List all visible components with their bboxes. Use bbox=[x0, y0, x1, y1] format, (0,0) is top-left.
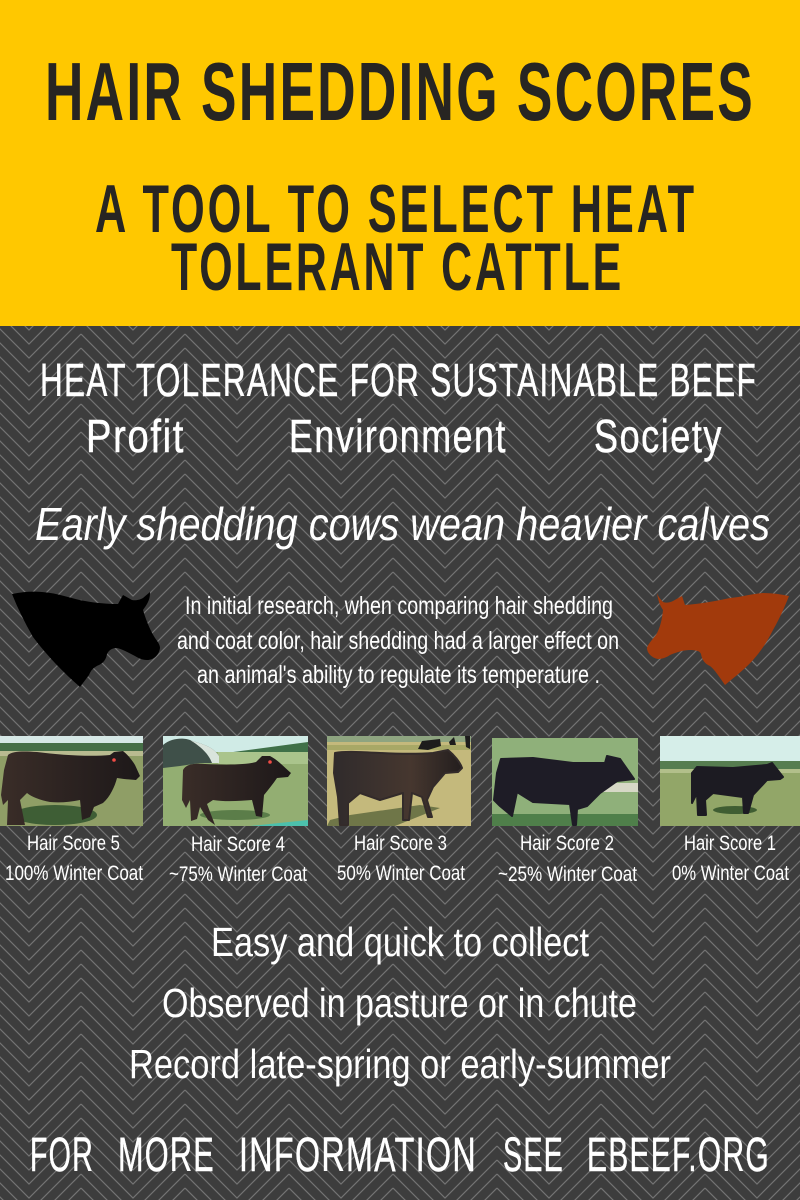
footer call to action: FOR bbox=[30, 1129, 94, 1182]
sustainability pillars: Profit bbox=[86, 410, 185, 462]
caption: hair score 4: Hair Score 4 bbox=[191, 833, 285, 856]
research paragraph: and coat color, hair shedding had a larger effect on bbox=[177, 627, 619, 655]
caption: hair score 3: Hair Score 3 bbox=[354, 832, 447, 855]
caption: hair score 4 bbox=[169, 833, 307, 886]
footer call to action: INFORMATION bbox=[239, 1129, 477, 1182]
sustainability pillars bbox=[86, 410, 723, 462]
photo: hair score 5 cow bbox=[0, 736, 143, 826]
caption: hair score 1 bbox=[672, 832, 789, 885]
caption: hair score 1: Hair Score 1 bbox=[684, 832, 776, 855]
photo: hair score 1 cow bbox=[660, 736, 800, 826]
caption: hair score 5: 100% Winter Coat bbox=[5, 862, 143, 885]
dark chevron background bbox=[0, 326, 800, 1200]
caption: hair score 2: ~25% Winter Coat bbox=[498, 863, 637, 886]
caption: hair score 5 bbox=[5, 832, 143, 885]
sustainability pillars: Environment bbox=[289, 410, 507, 462]
caption: hair score 2 bbox=[498, 832, 637, 886]
footer call to action bbox=[30, 1129, 770, 1182]
benefits list: Easy and quick to collect bbox=[211, 919, 590, 965]
benefits list: Record late-spring or early-summer bbox=[129, 1041, 671, 1087]
caption: hair score 2: Hair Score 2 bbox=[520, 832, 614, 855]
research paragraph: In initial research, when comparing hair shedding bbox=[185, 592, 613, 620]
benefits list: Observed in pasture or in chute bbox=[162, 980, 637, 1026]
caption: hair score 3: 50% Winter Coat bbox=[337, 862, 465, 885]
sustainability pillars: Society bbox=[594, 410, 723, 462]
research paragraph bbox=[177, 592, 619, 689]
footer call to action: MORE bbox=[118, 1129, 215, 1182]
photo: hair score 4 cow bbox=[163, 736, 308, 826]
benefits list bbox=[129, 919, 671, 1087]
caption: hair score 5: Hair Score 5 bbox=[27, 832, 120, 855]
yellow title banner bbox=[0, 0, 800, 326]
photo: hair score 3 cow bbox=[327, 736, 471, 826]
footer call to action: SEE bbox=[503, 1129, 564, 1182]
research paragraph: an animal's ability to regulate its temperature . bbox=[197, 661, 600, 689]
subtitle bbox=[95, 171, 697, 305]
caption: hair score 4: ~75% Winter Coat bbox=[169, 863, 307, 886]
icon: rust cow silhouette bbox=[647, 593, 789, 685]
caption: hair score 3 bbox=[337, 832, 465, 885]
photo: hair score 2 cow bbox=[492, 738, 638, 826]
icon: black cow silhouette bbox=[12, 592, 160, 687]
